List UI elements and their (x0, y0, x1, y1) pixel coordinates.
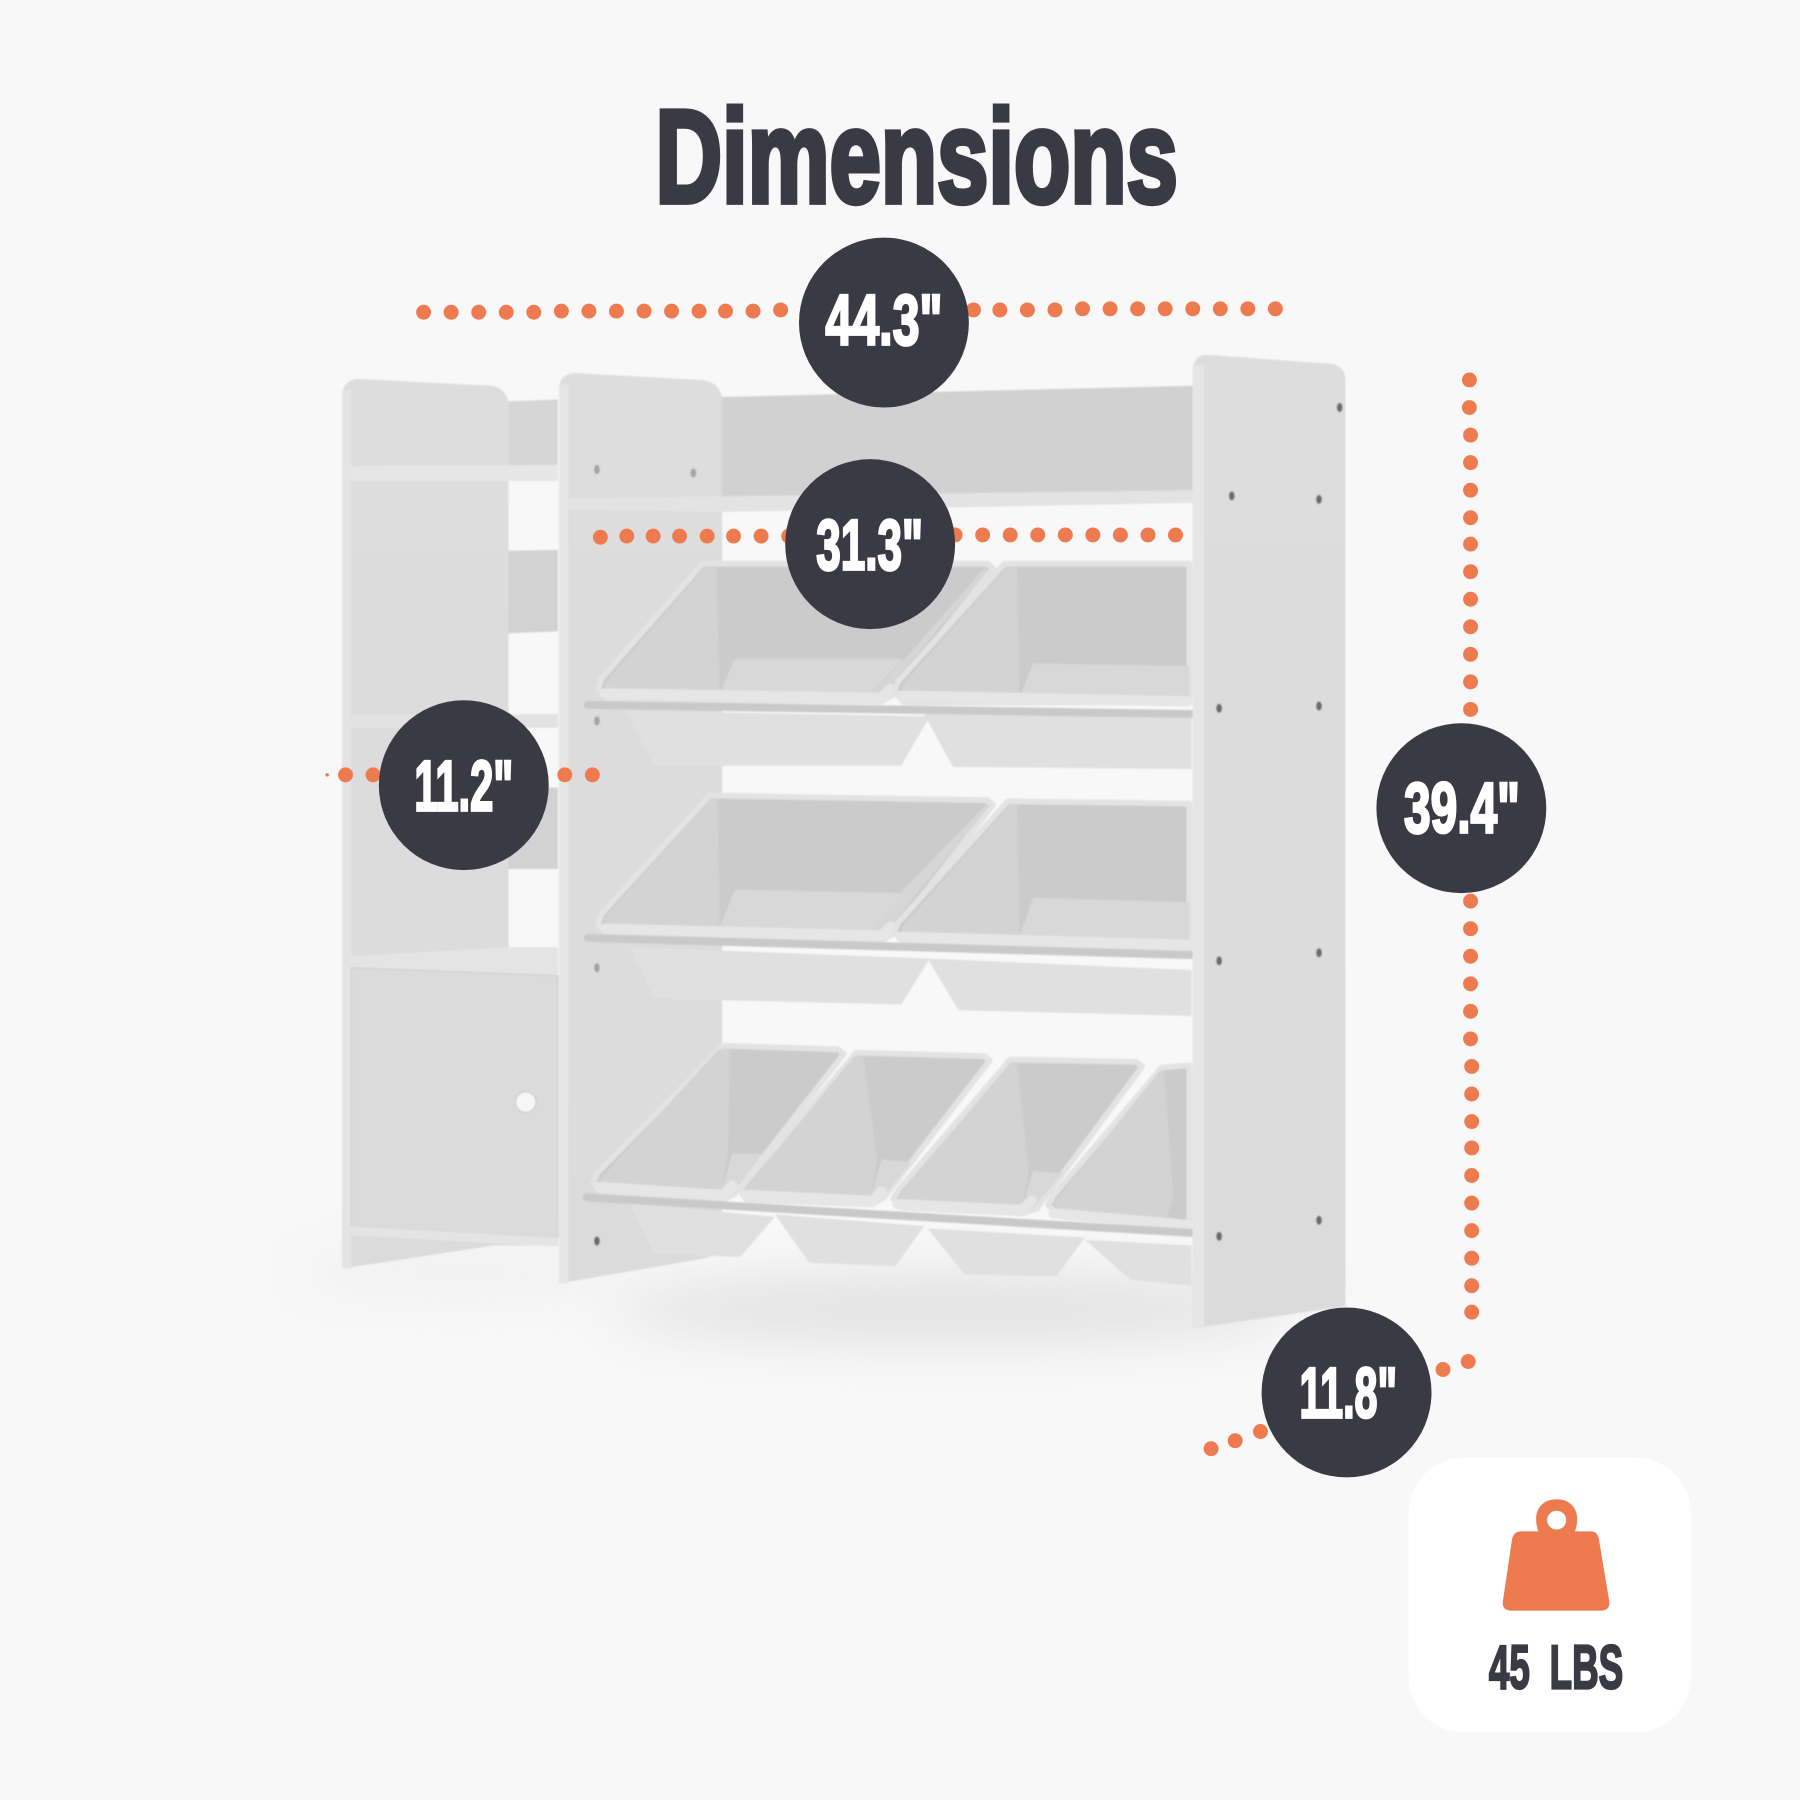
badge: 11.2 inch: 11.2" (414, 747, 513, 826)
row 1 bins (588, 564, 1192, 769)
right panel (1193, 355, 1345, 1328)
weight card (1409, 1458, 1691, 1732)
badge: 11.2 inch (379, 700, 549, 870)
floor shadow (287, 1256, 1297, 1341)
door knob (515, 1092, 536, 1112)
screws (594, 403, 1343, 1246)
top back board (714, 386, 1193, 498)
badge: 39.4 inch (1376, 723, 1546, 893)
cabinet door (351, 968, 558, 1238)
badge: 11.8 inch (1262, 1308, 1432, 1477)
top shelf (568, 490, 1193, 512)
badge: 31.3 inch (785, 459, 955, 629)
badge: 11.8 inch: 11.8" (1299, 1355, 1397, 1434)
centre panel (559, 373, 722, 1283)
dotted line: height (1462, 373, 1479, 1320)
badge: 39.4 inch: 39.4" (1404, 769, 1520, 848)
icon: weight (1503, 1499, 1609, 1611)
shelf unit illustration (342, 355, 1345, 1328)
dotted line: diagonal depth (1204, 1354, 1476, 1456)
title: Dimensions (655, 82, 1178, 230)
dotted line: inner width (593, 527, 1183, 545)
left unit (342, 379, 558, 1268)
dotted line: side depth (325, 767, 600, 782)
rod (588, 705, 1192, 714)
badge: 44.3 inch: 44.3" (825, 281, 942, 360)
badge: 31.3 inch: 31.3" (816, 506, 923, 585)
badge: 44.3 inch (799, 238, 969, 408)
dotted line: overall width (416, 301, 1283, 320)
row 3 bins (587, 1046, 1192, 1286)
weight label: 45 LBS (1489, 1634, 1623, 1703)
row 2 bins (588, 796, 1192, 1016)
